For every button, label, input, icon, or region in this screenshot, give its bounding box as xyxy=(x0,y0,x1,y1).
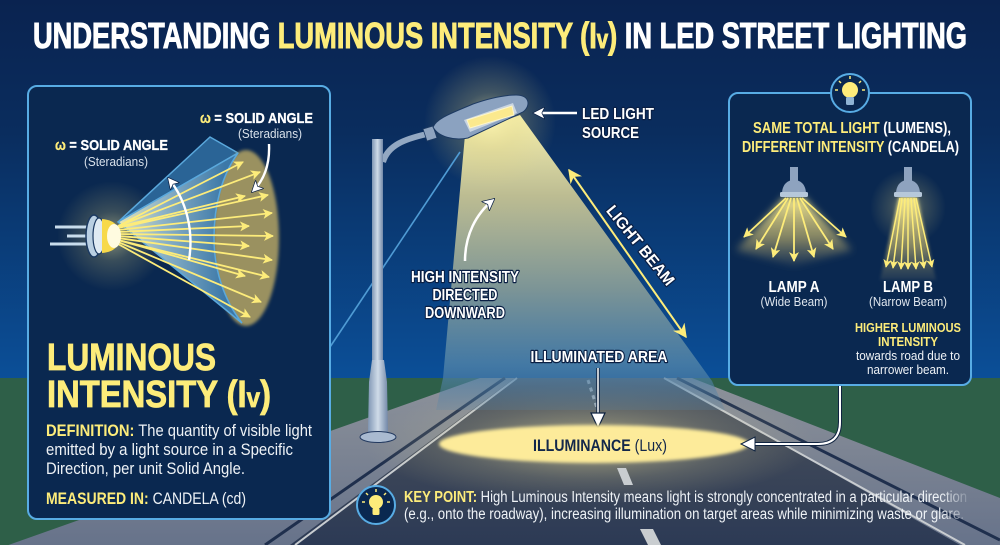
label: high intensity directed downward: DOWNWARD xyxy=(425,305,505,322)
label: solid angle right xyxy=(200,110,313,141)
illuminance ellipse: ILLUMINANCE (Lux) xyxy=(533,436,667,455)
label: solid angle left: ω = SOLID ANGLE xyxy=(55,137,168,154)
heading: same total light: SAME TOTAL LIGHT (LUMENS), xyxy=(753,120,951,137)
label: LED light source: LED LIGHT xyxy=(582,106,654,123)
label: lamp A: LAMP A xyxy=(768,279,820,296)
light beam xyxy=(436,115,725,410)
label: solid angle left: (Steradians) xyxy=(84,155,148,169)
icon: key point bulb xyxy=(357,486,395,524)
label: lamp A xyxy=(760,279,828,309)
lamp B narrow beam xyxy=(870,167,946,280)
label: LED light source xyxy=(535,106,654,142)
note: higher luminous intensity: HIGHER LUMINOUS xyxy=(855,320,961,335)
note: higher luminous intensity: INTENSITY xyxy=(878,334,938,349)
icon: light bulb badge xyxy=(831,74,869,112)
lamp A wide beam xyxy=(736,167,852,266)
heading: same total light xyxy=(742,120,959,156)
background: night sky xyxy=(0,0,1000,379)
arrow: directed downward xyxy=(465,200,493,261)
street lamp xyxy=(330,56,556,442)
heading: same total light: DIFFERENT INTENSITY (CANDELA) xyxy=(742,139,959,156)
heading: luminous intensity: INTENSITY (Iv) xyxy=(47,374,271,416)
label: solid angle left xyxy=(55,137,168,169)
panel: lamp comparison xyxy=(729,74,971,385)
label: lamp B: LAMP B xyxy=(883,279,933,296)
panel: luminous intensity xyxy=(28,86,330,519)
solid angle diagram xyxy=(57,137,279,326)
label: high intensity directed downward xyxy=(411,269,520,322)
label: LED light source: SOURCE xyxy=(582,125,639,142)
label: lamp A: (Wide Beam) xyxy=(760,295,828,309)
note: higher luminous intensity xyxy=(855,320,961,377)
heading: luminous intensity xyxy=(47,337,271,416)
label: light beam: LIGHT BEAM xyxy=(602,203,677,289)
definition text: emitted by a light source in a Specific xyxy=(46,441,293,459)
label: lamp B: (Narrow Beam) xyxy=(869,295,947,309)
note: higher luminous intensity: narrower beam. xyxy=(867,363,949,377)
heading: luminous intensity: LUMINOUS xyxy=(47,337,216,379)
note: higher luminous intensity: towards road due to xyxy=(856,349,960,363)
label: solid angle right: (Steradians) xyxy=(238,127,302,141)
key point text xyxy=(404,489,967,523)
key point xyxy=(357,486,967,524)
definition text xyxy=(46,422,312,478)
label: illuminated area: ILLUMINATED AREA xyxy=(530,349,668,366)
definition text: Direction, per unit Solid Angle. xyxy=(46,460,245,478)
arrow: to illuminance xyxy=(591,368,605,428)
measured in: MEASURED IN: CANDELA (cd) xyxy=(46,490,246,508)
arrow: light beam xyxy=(569,170,686,337)
label: high intensity directed downward: DIRECTED xyxy=(432,287,498,304)
connector arrow: right panel to illuminance xyxy=(741,385,840,451)
road scene xyxy=(0,378,1000,545)
definition text: DEFINITION: The quantity of visible light xyxy=(46,422,312,440)
label: solid angle right: ω = SOLID ANGLE xyxy=(200,110,313,127)
label: high intensity directed downward: HIGH INTENSITY xyxy=(411,269,520,286)
illuminance ellipse xyxy=(439,425,749,463)
background: grass xyxy=(0,378,1000,545)
label: lamp B xyxy=(869,279,947,309)
icon: LED emitter xyxy=(50,215,121,257)
